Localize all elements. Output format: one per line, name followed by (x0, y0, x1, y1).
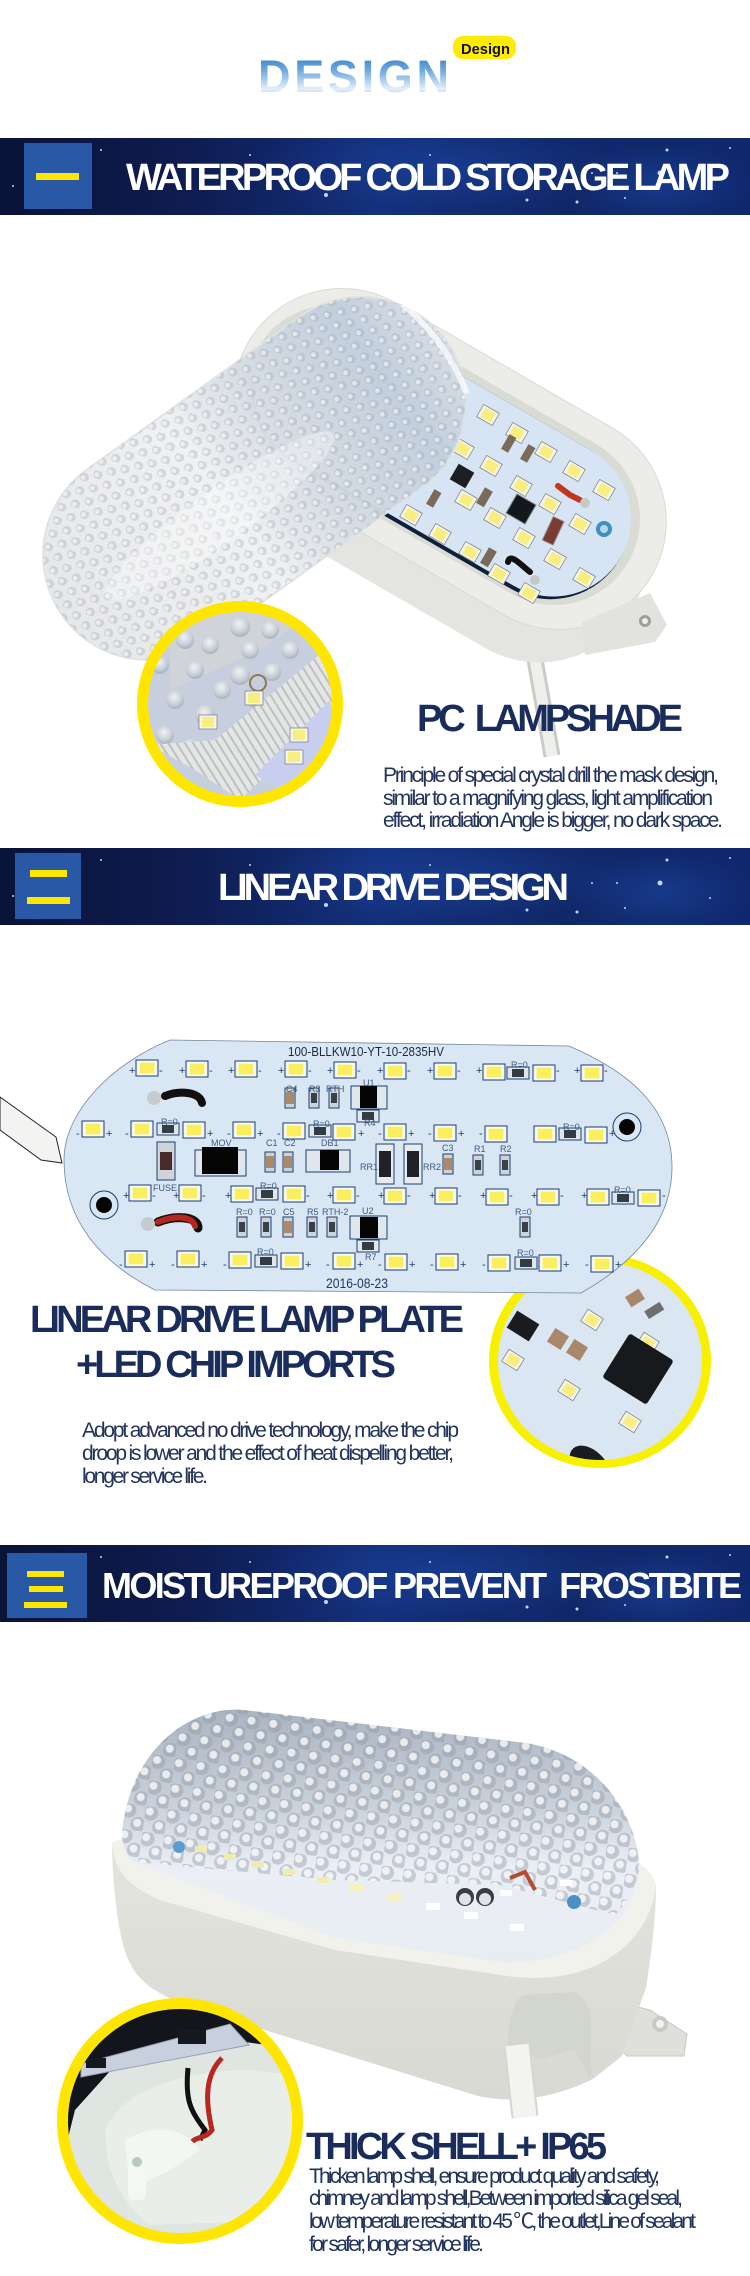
product photo: assembled lamp (112, 1710, 687, 2117)
dome lens (122, 1710, 639, 1963)
silkscreen labels: C2 (284, 1138, 296, 1148)
badge: Design: Design (461, 41, 510, 58)
LED board edge (81, 2024, 249, 2077)
title: DESIGN (258, 36, 516, 102)
heading: linear drive lamp plate: +LED CHIP IMPORTS (76, 1344, 396, 1386)
silkscreen labels: C3 (442, 1143, 454, 1153)
banner title 3: MOISTUREPROOF PREVENT FROSTBITE (102, 1565, 742, 1606)
silkscreen labels: R=0 (517, 1248, 534, 1258)
black and red solder wires (141, 1091, 202, 1231)
silkscreen labels: R4 (364, 1118, 376, 1128)
text block: linear drive description: droop is lower and the effect of heat dispelling better, (82, 1442, 454, 1465)
number icon 3 (7, 1553, 87, 1618)
mounting tab (610, 2003, 687, 2056)
black MOV chip (602, 1333, 674, 1405)
text block: shell description (309, 2165, 696, 2256)
heading: linear drive lamp plate: LINEAR DRIVE LAMP PLATE (30, 1299, 464, 1341)
silkscreen labels: U1 (363, 1078, 375, 1088)
text block: PC lampshade description (383, 764, 723, 832)
silkscreen labels: MOV (211, 1138, 232, 1148)
shell body (112, 1843, 656, 2099)
number icon 2 (15, 853, 81, 919)
LED driver board: 2016-08-23 (326, 1275, 388, 1291)
badge: Design (453, 36, 516, 59)
shell rim (112, 1830, 656, 1978)
silkscreen labels: R=0 (515, 1207, 532, 1217)
LED rows (82, 1060, 660, 1272)
silkscreen labels: R5 (307, 1207, 319, 1217)
section banner 2 (0, 836, 750, 933)
text block: shell description: low temperature resistant to 45 ℃, the outlet,Line of sealant (309, 2210, 696, 2233)
power cable (517, 2045, 525, 2117)
lens removed from the housing (2, 256, 507, 701)
polarity marks: +-+-+-+-+-+-+-+-+- (129, 1065, 608, 1077)
mounting tab (582, 593, 667, 655)
section banner 1 (0, 126, 750, 223)
white lead wire (0, 1097, 62, 1163)
banner title 1: WATERPROOF COLD STORAGE LAMP (126, 157, 730, 199)
silkscreen labels: R=0 (511, 1060, 528, 1070)
silkscreen labels: C1 (266, 1138, 278, 1148)
number icon 1 (24, 143, 92, 209)
housing (175, 249, 706, 702)
silkscreen labels: U2 (362, 1206, 374, 1216)
heading: PC LAMPSHADE: PC LAMPSHADE (417, 698, 683, 740)
mounting holes (90, 1113, 641, 1219)
silkscreen labels (153, 1060, 631, 1262)
silkscreen labels: R=0 (563, 1122, 580, 1132)
silkscreen labels: RR1 (360, 1162, 378, 1172)
text block: shell description: for safer, longer service life. (309, 2233, 484, 2256)
text block: linear drive description (82, 1419, 459, 1488)
text block: PC lampshade description: effect, irradiation Angle is bigger, no dark space. (383, 809, 723, 832)
inset: lens close-up (136, 600, 345, 808)
text block: PC lampshade description: similar to a magnifying glass, light amplification (383, 787, 713, 810)
silkscreen labels: R=0 (313, 1119, 330, 1129)
text block: shell description: chimney and lamp shell,Between imported silica gel seal, (309, 2187, 683, 2210)
silkscreen labels: RR2 (423, 1162, 441, 1172)
banner title 2: LINEAR DRIVE DESIGN (218, 867, 569, 909)
silkscreen labels: R=0 (259, 1207, 276, 1217)
inset: shell interior close-up (57, 1998, 303, 2244)
silkscreen labels: RTH (326, 1084, 344, 1094)
silkscreen labels: R2 (500, 1144, 512, 1154)
silkscreen labels: R3 (309, 1084, 321, 1094)
polarity marks: -+-+-+-+-+-+-+ (76, 1128, 615, 1140)
silkscreen labels: R1 (474, 1144, 486, 1154)
LED board components (400, 404, 615, 604)
polarity marks: -+-+-+-+-+-+-+-+ (119, 1259, 621, 1271)
silkscreen labels: R=0 (236, 1207, 253, 1217)
silkscreen labels: R=0 (257, 1247, 274, 1257)
silkscreen labels: R=0 (260, 1181, 277, 1191)
LEDs under the dome (195, 1846, 572, 1931)
inset: chip close-up (489, 1254, 711, 1470)
small resistors and capacitors (237, 1088, 530, 1237)
heading: linear drive lamp plate (30, 1299, 464, 1386)
silkscreen labels: R=0 (161, 1117, 178, 1127)
R=0 jumpers (157, 1067, 634, 1269)
heading: THICK SHELL + IP65: THICK SHELL+ IP65 (306, 2126, 607, 2168)
power cable (533, 648, 552, 756)
silkscreen labels: DB1 (321, 1138, 339, 1148)
product photo: opened lamp (2, 249, 706, 756)
silkscreen labels: R=0 (614, 1185, 631, 1195)
LED driver board (64, 1040, 672, 1293)
silkscreen labels: C4 (286, 1084, 298, 1094)
text block: linear drive description: Adopt advanced no drive technology, make the chip (82, 1419, 459, 1442)
silkscreen labels: RTH-2 (322, 1207, 348, 1217)
text block: shell description: Thicken lamp shell, ensure product quality and safety, (309, 2165, 660, 2188)
ICs and MOV (157, 1086, 387, 1239)
lens drops (154, 618, 299, 744)
cable opening (507, 1992, 591, 2079)
silkscreen labels: FUSE (153, 1183, 177, 1193)
silkscreen labels: R7 (365, 1252, 377, 1262)
section banner 3 (0, 1533, 750, 1630)
text block: linear drive description: longer service life. (82, 1465, 208, 1488)
comb ribs (157, 656, 332, 796)
LED driver board: 100-BLLKW10-YT-10-2835HV (288, 1044, 444, 1059)
silkscreen labels: C5 (283, 1207, 295, 1217)
title word: DESIGN (258, 51, 449, 102)
polarity marks: +-+-+-+-+-+-+-+-+- (123, 1190, 666, 1202)
text block: PC lampshade description: Principle of special crystal drill the mask design, (383, 764, 719, 787)
polarity marks (76, 1065, 666, 1271)
